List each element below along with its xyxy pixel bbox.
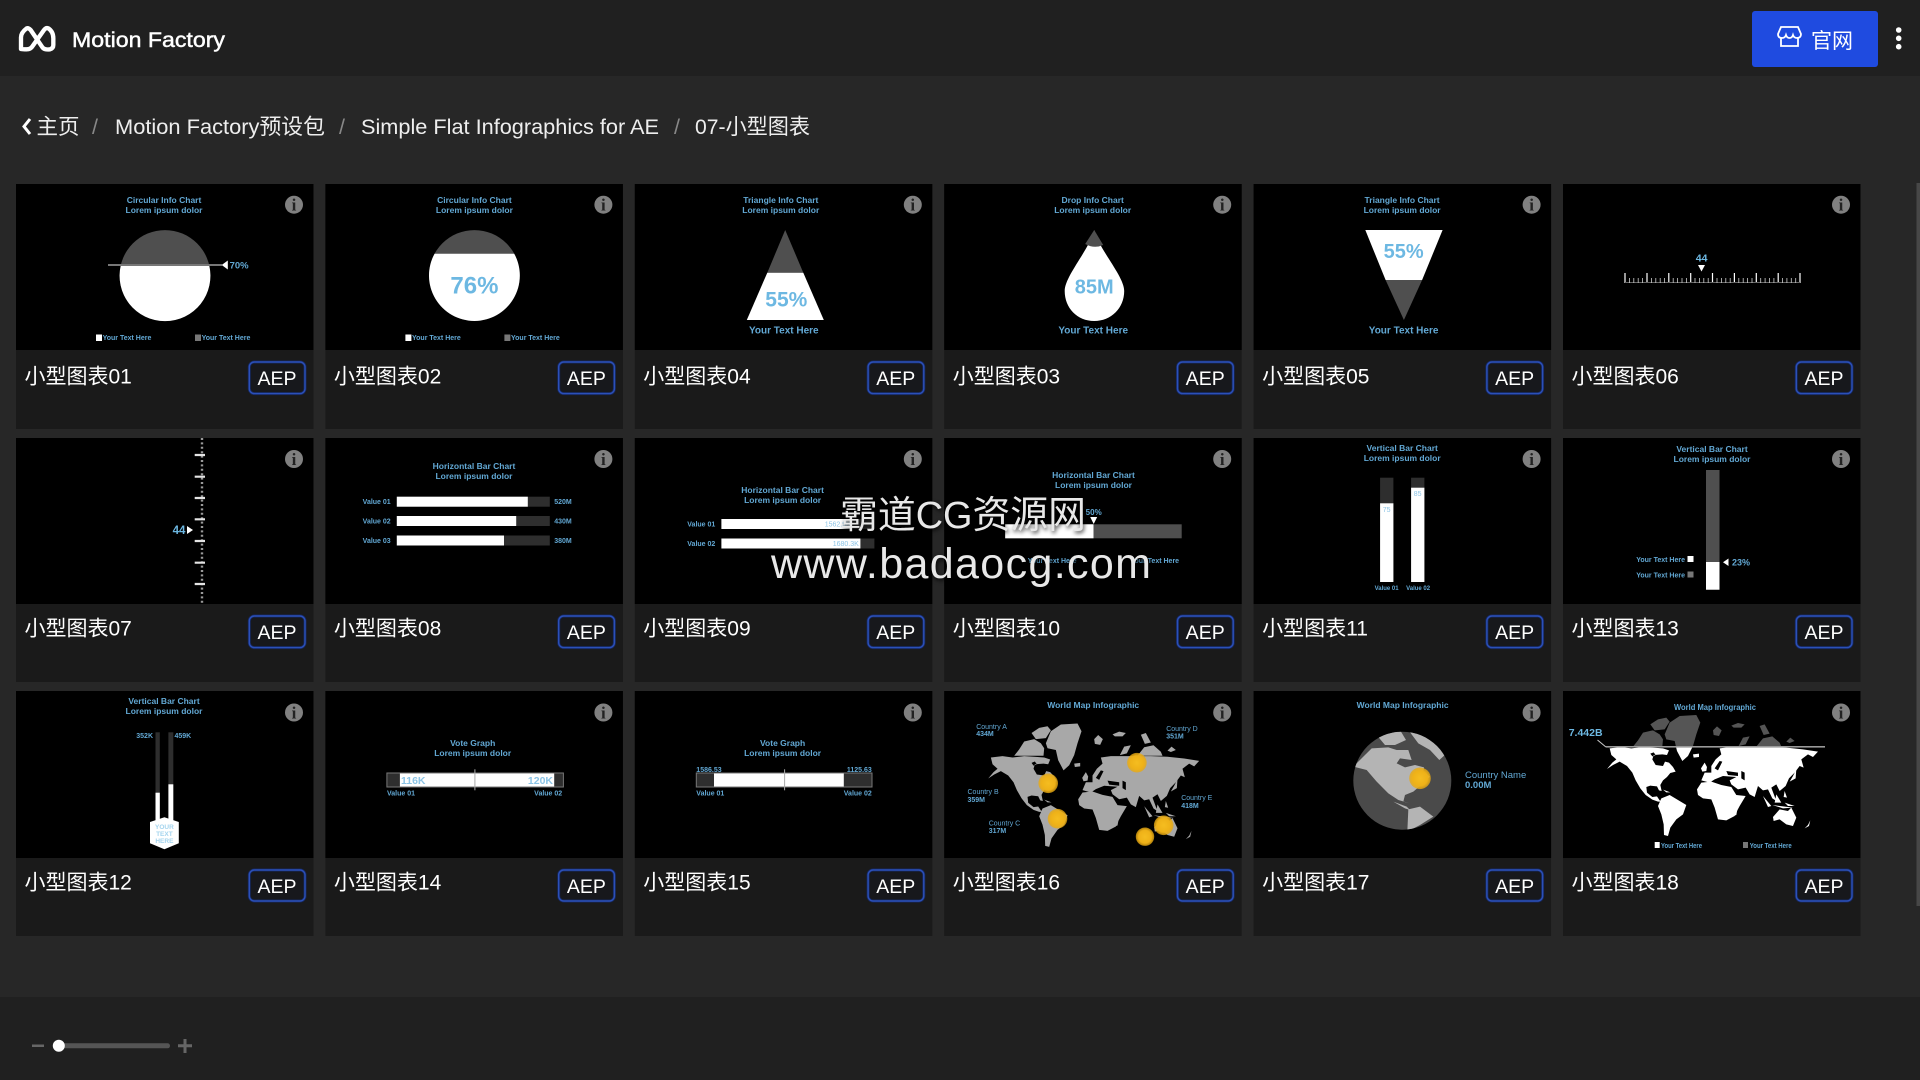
chart: vertical ruler gauge 44 [173, 438, 205, 604]
slider thumb [53, 1040, 65, 1052]
panel: card 05 inverted triangle chart [1254, 184, 1551, 429]
chart: circle 76%: Your Text Here [511, 335, 560, 342]
card name: 小型图表14 [334, 872, 442, 894]
card name: 小型图表06 [1572, 366, 1679, 388]
AEP badge: AEP [876, 368, 915, 390]
icon: info: i [1220, 703, 1225, 722]
AEP badge: AEP [1186, 876, 1225, 898]
panel: card 04 triangle chart [635, 184, 932, 429]
panel: card 08 horizontal bars [325, 438, 623, 682]
icon: info [1523, 450, 1541, 469]
chart: world map with markers [968, 700, 1213, 847]
chart: globe with marker: World Map Infographic [1357, 700, 1449, 710]
icon: info [1832, 703, 1850, 722]
AEP badge: AEP [567, 622, 606, 644]
panel: card 12 thermometer bars [16, 691, 314, 936]
chart: world map fill level 7.442B: World Map Infographic [1674, 703, 1757, 712]
chart: twin vertical bars with hexagon: TEXT [156, 831, 173, 838]
chart: world map with markers: 418M [1181, 803, 1199, 810]
panel: card 14 vote graph [325, 691, 623, 936]
chart: two horizontal bars: Value 01 [687, 522, 715, 528]
AEP badge: AEP [1186, 622, 1225, 644]
footer zoom slider bar [0, 997, 1920, 1080]
card name: 小型图表11 [1262, 618, 1368, 640]
chart: vote bar 1586.53 vs 1125.63: 1586.53 [696, 767, 722, 774]
card name: 小型图表10 [953, 618, 1060, 640]
chart: drop 85M: Your Text Here [1058, 326, 1128, 336]
chart: world map with markers: 317M [989, 828, 1006, 835]
AEP badge [559, 362, 614, 394]
chart: vote bar 1586.53 vs 1125.63: Vote Graph [760, 738, 805, 748]
AEP badge: AEP [1804, 876, 1844, 898]
chart: world map with markers: Country C [989, 820, 1020, 828]
chart: inverted triangle 55%: Your Text Here [1369, 326, 1439, 336]
icon: info: i [1220, 450, 1225, 469]
icon: info: i [1839, 196, 1844, 214]
chart: vertical ruler gauge 44: 44 [173, 525, 186, 537]
chart: inverted triangle 55%: Triangle Info Chart [1365, 195, 1440, 205]
icon: info [594, 196, 612, 214]
chart: world map with markers: Country A [976, 724, 1007, 731]
zoom out icon [32, 1044, 44, 1047]
chart: inverted triangle 55%: Lorem ipsum dolor [1364, 205, 1441, 215]
chart: vote bar 116K vs 120K: 116K [401, 775, 426, 787]
AEP badge [1487, 870, 1543, 901]
panel: card 01 circular chart [16, 184, 314, 429]
official site button [1752, 11, 1878, 67]
chart: drop 85M: Drop Info Chart [1062, 195, 1124, 205]
icon: info [1832, 450, 1850, 469]
chart: drop 85M [1054, 195, 1132, 336]
panel: card 17 globe [1254, 691, 1551, 936]
chart: circle 70% [96, 195, 250, 342]
AEP badge: AEP [257, 876, 297, 898]
icon: info: i [1839, 450, 1844, 469]
AEP badge [559, 616, 614, 648]
chart: two vertical bars [1364, 443, 1441, 592]
chart: twin vertical bars with hexagon: YOUR [155, 824, 174, 831]
chart: world map with markers: 351M [1166, 734, 1184, 740]
chart: single vertical bar 23%: Lorem ipsum dolor [1674, 454, 1751, 464]
icon: info [904, 703, 922, 722]
AEP badge: AEP [257, 368, 297, 390]
breadcrumb: / [92, 115, 98, 139]
icon: info: i [601, 703, 606, 722]
chart: progress bar 50%: 50% [1086, 508, 1102, 517]
scrollbar [1916, 183, 1920, 906]
AEP badge [1796, 616, 1852, 648]
icon: info: i [292, 703, 297, 722]
AEP badge: AEP [1495, 622, 1534, 644]
icon: info: i [910, 450, 915, 469]
chart: circle 76%: Your Text Here [412, 335, 461, 342]
chart: circle 70%: Your Text Here [103, 335, 151, 342]
watermark [770, 495, 1151, 588]
official site button: 官网 [1811, 30, 1853, 53]
chart: three horizontal bars: Lorem ipsum dolor [436, 471, 513, 481]
AEP badge: AEP [1495, 368, 1534, 390]
chart: globe with marker [1353, 700, 1526, 832]
chart: world map with markers: World Map Infographic [1047, 700, 1139, 710]
card name: 小型图表07 [24, 618, 132, 640]
chart: three horizontal bars: Value 01 [363, 499, 391, 506]
icon: info [285, 703, 303, 722]
card name: 小型图表04 [643, 366, 751, 388]
chart: world map fill level 7.442B: Your Text Here [1661, 843, 1702, 850]
chart: circle 76% [405, 195, 560, 342]
card name: 小型图表15 [643, 872, 751, 894]
card name: 小型图表17 [1262, 872, 1369, 894]
chart: vote bar 116K vs 120K: Lorem ipsum dolor [434, 748, 512, 758]
icon: info [1213, 196, 1231, 214]
icon: info: i [601, 196, 606, 214]
AEP badge [1487, 362, 1543, 394]
chart: world map with markers: 434M [976, 731, 994, 738]
AEP badge [1178, 616, 1233, 648]
chart: circle 70%: 70% [230, 260, 249, 272]
chart: inverted triangle 55%: 55% [1384, 241, 1424, 263]
chart: three horizontal bars: 380M [554, 538, 572, 545]
chart: globe with marker: 0.00M [1465, 780, 1491, 791]
AEP badge: AEP [876, 622, 915, 644]
chart: progress bar 50% [1005, 470, 1182, 565]
chart: vote bar 1586.53 vs 1125.63: Lorem ipsum dolor [744, 748, 822, 758]
chart: twin vertical bars with hexagon: Vertical Bar Chart [128, 696, 200, 706]
card name: 小型图表18 [1572, 872, 1679, 894]
brand name: Motion Factory [72, 28, 225, 52]
icon: info [1832, 196, 1850, 214]
chart: twin vertical bars with hexagon: HERE [155, 838, 174, 845]
AEP badge: AEP [257, 622, 297, 644]
logo icon [21, 28, 53, 49]
chart: drop 85M: Lorem ipsum dolor [1054, 205, 1132, 215]
icon: info [1213, 450, 1231, 469]
chart: vote bar 1586.53 vs 1125.63: 1125.63 [847, 767, 872, 774]
panel: card 03 drop chart [944, 184, 1242, 429]
chart: two vertical bars: Lorem ipsum dolor [1364, 453, 1441, 463]
icon: info [594, 703, 612, 722]
icon: info [904, 450, 922, 469]
chart: circle 70%: Circular Info Chart [127, 195, 201, 205]
top navigation bar [0, 0, 1920, 76]
card name: 小型图表09 [643, 618, 751, 640]
AEP badge [1796, 870, 1852, 901]
chart: triangle 55%: 55% [765, 288, 808, 312]
chart: vote bar 116K vs 120K: Vote Graph [450, 738, 495, 748]
card name: 小型图表13 [1572, 618, 1679, 640]
chart: two horizontal bars: Lorem ipsum dolor [744, 495, 822, 505]
chart: triangle 55% [742, 195, 824, 336]
icon: info: i [1220, 196, 1225, 214]
icon: info [1523, 703, 1541, 722]
icon: info: i [910, 703, 915, 722]
AEP badge [249, 362, 305, 394]
chart: three horizontal bars: Value 02 [363, 518, 391, 526]
chart: vote bar 116K vs 120K: 120K [528, 775, 553, 787]
AEP badge [249, 616, 305, 648]
card name: 小型图表01 [24, 366, 132, 388]
AEP badge [559, 870, 614, 901]
chart: three horizontal bars: 520M [554, 499, 572, 506]
chart: three horizontal bars: 430M [554, 518, 572, 526]
AEP badge: AEP [567, 876, 606, 898]
icon: info: i [910, 196, 915, 214]
watermark: www.badaocg.com [770, 540, 1151, 588]
chart: twin vertical bars with hexagon [126, 696, 203, 849]
AEP badge: AEP [1804, 622, 1844, 644]
icon: info [1523, 196, 1541, 214]
chart: two horizontal bars [687, 485, 874, 548]
breadcrumb: 07-小型图表 [695, 115, 810, 139]
chart: progress bar 50%: Lorem ipsum dolor [1055, 480, 1133, 490]
slider track [60, 1043, 170, 1048]
card name: 小型图表16 [953, 872, 1060, 894]
icon: info: i [1839, 703, 1844, 722]
AEP badge [249, 870, 305, 901]
zoom in icon [178, 1039, 192, 1053]
chart: world map with markers: Country E [1181, 795, 1213, 802]
watermark: 霸道CG资源网 [840, 495, 1086, 537]
panel: card 18 filled world map [1563, 691, 1860, 936]
chart: triangle 55%: Triangle Info Chart [743, 195, 819, 205]
card name: 小型图表03 [953, 366, 1060, 388]
chart: world map with markers: Country B [968, 789, 999, 796]
chart: vote bar 1586.53 vs 1125.63: Value 02 [844, 790, 872, 798]
breadcrumb: / [674, 115, 680, 139]
chart: two vertical bars: 85 [1414, 491, 1422, 498]
panel: card 13 vertical bar [1563, 438, 1860, 682]
breadcrumb [24, 115, 810, 139]
chart: two vertical bars: Vertical Bar Chart [1367, 443, 1438, 453]
chart: three horizontal bars [363, 461, 572, 546]
AEP badge [1796, 362, 1852, 394]
chart: vote bar 116K vs 120K: Value 01 [387, 790, 415, 798]
chart: two vertical bars: Value 01 [1375, 586, 1399, 592]
chart: single vertical bar 23% [1636, 444, 1751, 590]
icon: info: i [1529, 450, 1534, 469]
icon: info: i [601, 450, 606, 469]
panel: card 11 vertical bars [1254, 438, 1551, 682]
card name: 小型图表05 [1262, 366, 1369, 388]
chart: single vertical bar 23%: Your Text Here [1636, 572, 1685, 580]
chart: single vertical bar 23%: Your Text Here [1636, 557, 1685, 564]
chart: world map fill level 7.442B: 7.442B [1569, 727, 1603, 739]
chart: world map with markers: 359M [968, 797, 985, 804]
chart: circle 70%: Lorem ipsum dolor [126, 205, 203, 215]
card name: 小型图表12 [24, 872, 132, 894]
AEP badge: AEP [567, 368, 606, 390]
AEP badge [1178, 870, 1233, 901]
chart: progress bar 50%: Horizontal Bar Chart [1052, 470, 1135, 480]
breadcrumb: Motion Factory预设包 [115, 115, 325, 139]
chart: world map with markers: Country D [1166, 726, 1198, 733]
AEP badge: AEP [1495, 876, 1534, 898]
chart: triangle 55%: Lorem ipsum dolor [742, 205, 820, 215]
breadcrumb: 主页 [36, 115, 80, 139]
chart: ruler gauge 44: 44 [1696, 252, 1708, 264]
chart: twin vertical bars with hexagon: 459K [174, 733, 191, 740]
chart: world map fill level 7.442B: Your Text Here [1750, 843, 1792, 850]
icon: info: i [1529, 196, 1534, 214]
chart: circle 76%: 76% [450, 272, 498, 300]
chart: two horizontal bars: Value 02 [687, 541, 715, 548]
AEP badge [1487, 616, 1543, 648]
icon: info [904, 196, 922, 214]
AEP badge [868, 616, 924, 648]
chart: drop 85M: 85M [1075, 276, 1114, 298]
icon: info: i [292, 450, 297, 469]
chart: circle 76%: Lorem ipsum dolor [436, 205, 514, 215]
chart: circle 70%: Your Text Here [202, 335, 250, 342]
chart: two vertical bars: Value 02 [1406, 586, 1431, 592]
icon: info: i [1529, 703, 1534, 722]
chart: vote bar 116K vs 120K: Value 02 [534, 790, 562, 798]
chart: single vertical bar 23%: Vertical Bar Chart [1676, 444, 1748, 454]
panel: card 06 horizontal ruler [1563, 184, 1860, 429]
icon: info: i [292, 196, 297, 214]
chart: twin vertical bars with hexagon: 352K [136, 733, 153, 740]
chart: triangle 55%: Your Text Here [749, 326, 819, 336]
chart: world map fill level 7.442B [1569, 703, 1825, 850]
AEP badge [868, 362, 924, 394]
panel: card 07 vertical ruler [16, 438, 314, 682]
panel: card 16 world map [944, 691, 1242, 936]
icon: info [285, 450, 303, 469]
panel: card 09 horizontal bars [635, 438, 932, 682]
chart: single vertical bar 23%: 23% [1732, 558, 1750, 568]
chart: progress bar 50%: Your Text Here [1028, 558, 1077, 565]
more menu icon [1896, 27, 1901, 50]
panel: card 15 vote graph [635, 691, 932, 936]
chart: ruler gauge 44 [1625, 252, 1800, 283]
icon: info [594, 450, 612, 469]
chart: twin vertical bars with hexagon: Lorem ipsum dolor [126, 706, 203, 716]
chart: vote bar 116K vs 120K [387, 738, 563, 798]
AEP badge [1178, 362, 1233, 394]
icon: info [285, 196, 303, 214]
panel: card 10 single horizontal bar [944, 438, 1242, 682]
chart: three horizontal bars: Value 03 [363, 538, 391, 545]
panel: card 02 circular chart [325, 184, 623, 429]
chart: circle 76%: Circular Info Chart [437, 195, 512, 205]
chart: vote bar 1586.53 vs 1125.63 [696, 738, 872, 798]
card name: 小型图表02 [334, 366, 441, 388]
chart: three horizontal bars: Horizontal Bar Chart [433, 461, 515, 471]
chart: two vertical bars: 75 [1383, 507, 1391, 514]
AEP badge: AEP [1186, 368, 1225, 390]
chart: vote bar 1586.53 vs 1125.63: Value 01 [696, 790, 724, 798]
AEP badge: AEP [1804, 368, 1844, 390]
chart: progress bar 50%: Your Text Here [1130, 558, 1179, 565]
breadcrumb: Simple Flat Infographics for AE [361, 115, 659, 139]
card name: 小型图表08 [334, 618, 441, 640]
chart: inverted triangle 55% [1364, 195, 1443, 336]
breadcrumb: / [339, 115, 345, 139]
AEP badge: AEP [876, 876, 915, 898]
icon: info [1213, 703, 1231, 722]
AEP badge [868, 870, 924, 901]
chart: two horizontal bars: 1562.9K [825, 522, 851, 528]
chart: two horizontal bars: Horizontal Bar Chart [741, 485, 824, 495]
chart: globe with marker: Country Name [1465, 770, 1526, 781]
chart: two horizontal bars: 1680.3K [833, 541, 859, 548]
